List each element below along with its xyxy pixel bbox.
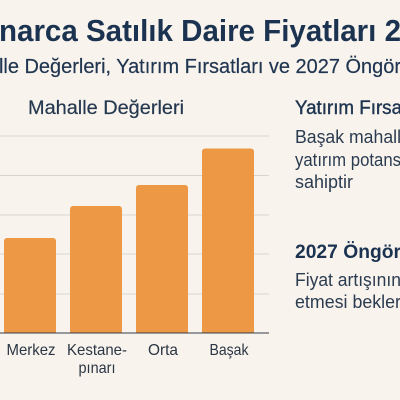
label: Başak: Başak	[210, 342, 249, 359]
text block: 2027 forecast: etmesi bekler	[295, 292, 400, 312]
label: Kestanepınarı: Kestane-	[67, 342, 127, 359]
bar: Kestanepınarı	[70, 206, 122, 333]
label: Orta: Orta	[148, 342, 178, 359]
bar: Başak	[202, 148, 254, 333]
label: Kestanepınarı second line: pınarı	[78, 360, 116, 377]
text block: investment opportunities	[295, 127, 400, 192]
bar: Orta	[136, 185, 188, 333]
label: Merkez: Merkez	[6, 342, 56, 359]
heading: neighbourhood values: Mahalle Değerleri	[28, 97, 184, 119]
text block: 2027 forecast	[295, 270, 400, 312]
bar chart	[0, 136, 269, 333]
text block: investment opportunities: sahiptir	[295, 172, 353, 192]
bar: Merkez	[4, 238, 56, 333]
text block: investment opportunities: Başak mahall	[295, 127, 400, 147]
heading: 2027 forecast: 2027 Öngör	[295, 240, 400, 263]
